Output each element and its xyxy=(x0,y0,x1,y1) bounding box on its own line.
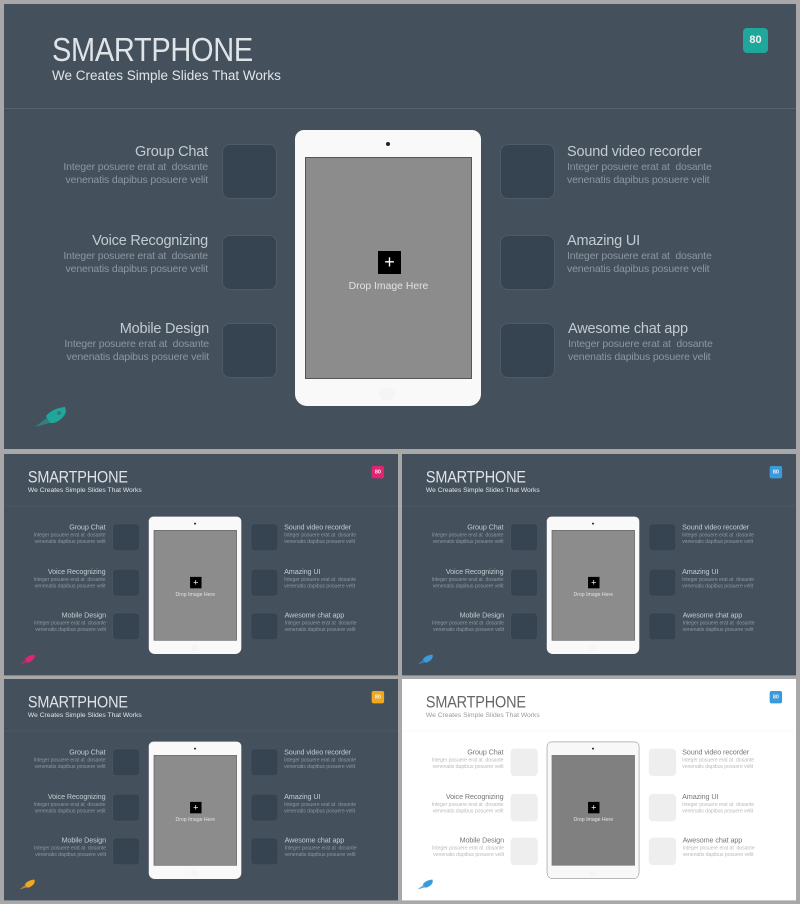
icon box: Voice Recognizing xyxy=(510,569,538,596)
page badge: 80 xyxy=(773,694,779,700)
small slide: blue xyxy=(402,454,796,675)
feature: Voice Recognizing: Integer posuere erat at dosante xyxy=(63,250,208,262)
icon box: Mobile Design xyxy=(222,323,277,378)
feature: Sound video recorder: venenatis dapibus posuere velit xyxy=(682,764,753,770)
icon box: Group Chat xyxy=(222,144,277,199)
feature: Amazing UI: venenatis dapibus posuere velit xyxy=(682,808,753,814)
tablet mockup: Drop Image Here xyxy=(349,281,428,292)
feature: Awesome chat app: venenatis dapibus posuere velit xyxy=(285,852,355,858)
feature: Amazing UI: Integer posuere erat at dosante xyxy=(567,250,712,262)
icon box: Sound video recorder xyxy=(500,144,555,199)
main slide: teal xyxy=(4,4,796,449)
feature: Awesome chat app: Integer posuere erat at dosante xyxy=(285,620,357,626)
icon box: Voice Recognizing xyxy=(222,235,277,290)
feature: Group Chat: venenatis dapibus posuere velit xyxy=(35,764,105,770)
feature: Group Chat xyxy=(432,524,504,545)
title: SMARTPHONE xyxy=(28,467,128,486)
feature: Group Chat: venenatis dapibus posuere velit xyxy=(66,174,208,186)
feature: Sound video recorder: Integer posuere erat at dosante xyxy=(567,161,712,173)
feature: Voice Recognizing: venenatis dapibus posuere velit xyxy=(433,808,503,814)
icon box: Amazing UI xyxy=(649,794,676,821)
feature: Sound video recorder xyxy=(567,144,712,186)
feature: Amazing UI xyxy=(682,568,754,589)
feature: Awesome chat app: venenatis dapibus posuere velit xyxy=(285,627,355,633)
page badge xyxy=(743,28,768,53)
icon box: Amazing UI xyxy=(649,569,676,596)
feature: Sound video recorder: Integer posuere erat at dosante xyxy=(284,532,356,538)
page badge: 80 xyxy=(773,469,779,475)
page badge: 80 xyxy=(749,34,762,46)
feature: Voice Recognizing: Voice Recognizing xyxy=(446,793,503,801)
feature: Voice Recognizing xyxy=(432,793,504,814)
tablet mockup: + xyxy=(591,577,596,587)
feature: Awesome chat app: Integer posuere erat at dosante xyxy=(683,845,755,851)
tablet mockup xyxy=(295,130,481,406)
feature: Sound video recorder xyxy=(682,749,754,770)
feature: Voice Recognizing: Voice Recognizing xyxy=(48,568,105,576)
feature: Voice Recognizing: Integer posuere erat at dosante xyxy=(432,801,503,807)
feature: Mobile Design: Integer posuere erat at dosante xyxy=(34,845,106,851)
feature: Group Chat xyxy=(63,144,208,186)
feature: Awesome chat app: Awesome chat app xyxy=(285,837,344,845)
feature: Amazing UI: Amazing UI xyxy=(284,793,320,801)
page badge xyxy=(770,691,782,703)
icon box: Mobile Design xyxy=(510,838,538,865)
icon box: Mobile Design xyxy=(510,613,538,640)
subtitle: We Creates Simple Slides That Works xyxy=(52,68,281,83)
feature: Mobile Design: Mobile Design xyxy=(460,837,504,845)
feature: Group Chat: Group Chat xyxy=(467,749,503,757)
feature: Group Chat xyxy=(34,524,106,545)
icon box: Group Chat xyxy=(510,524,538,551)
title: SMARTPHONE xyxy=(52,31,253,68)
feature: Amazing UI: venenatis dapibus posuere velit xyxy=(682,583,753,589)
feature: Sound video recorder: Sound video recorder xyxy=(284,524,351,532)
tablet mockup xyxy=(149,517,241,654)
feature: Group Chat: Group Chat xyxy=(69,524,105,532)
feature: Mobile Design xyxy=(432,612,504,633)
feature: Voice Recognizing: Integer posuere erat at dosante xyxy=(432,576,503,582)
feature: Group Chat: venenatis dapibus posuere velit xyxy=(35,539,105,545)
feature: Mobile Design: venenatis dapibus posuere velit xyxy=(67,351,209,363)
page badge: 80 xyxy=(375,469,381,475)
feature: Awesome chat app: Awesome chat app xyxy=(568,321,688,337)
feature: Awesome chat app xyxy=(682,837,755,858)
icon box: Voice Recognizing xyxy=(112,569,140,596)
feature: Voice Recognizing: venenatis dapibus posuere velit xyxy=(35,583,105,589)
subtitle: We Creates Simple Slides That Works xyxy=(28,486,142,493)
icon box: Sound video recorder xyxy=(649,524,676,551)
feature: Group Chat: venenatis dapibus posuere velit xyxy=(433,764,503,770)
title: SMARTPHONE xyxy=(426,467,526,486)
feature: Awesome chat app: venenatis dapibus posuere velit xyxy=(568,351,710,363)
feature: Voice Recognizing: Voice Recognizing xyxy=(446,568,503,576)
feature: Voice Recognizing xyxy=(34,793,106,814)
tablet mockup xyxy=(547,517,639,654)
subtitle: We Creates Simple Slides That Works xyxy=(28,711,142,718)
feature: Mobile Design xyxy=(34,837,106,858)
tablet mockup: Drop Image Here xyxy=(573,817,613,822)
feature: Group Chat: Integer posuere erat at dosante xyxy=(34,757,105,763)
feature: Sound video recorder xyxy=(284,749,356,770)
icon: rocket xyxy=(20,880,35,890)
feature: Sound video recorder: venenatis dapibus posuere velit xyxy=(284,764,355,770)
icon box: Mobile Design xyxy=(112,613,140,640)
page badge xyxy=(372,466,384,478)
small slide: amber xyxy=(4,679,398,900)
feature: Awesome chat app: Awesome chat app xyxy=(683,837,742,845)
feature: Sound video recorder: Sound video recorder xyxy=(682,749,749,757)
icon box: Voice Recognizing xyxy=(510,794,538,821)
feature: Awesome chat app: Integer posuere erat at dosante xyxy=(683,620,755,626)
feature: Amazing UI: Amazing UI xyxy=(567,233,640,249)
tablet mockup: Drop Image Here xyxy=(175,817,215,822)
tablet mockup: Drop Image Here xyxy=(573,592,613,597)
feature: Sound video recorder: venenatis dapibus posuere velit xyxy=(284,539,355,545)
page badge xyxy=(770,466,782,478)
tablet mockup: + xyxy=(384,252,395,272)
subtitle: We Creates Simple Slides That Works xyxy=(426,486,540,493)
title: SMARTPHONE xyxy=(28,692,128,711)
icon box: Amazing UI xyxy=(251,794,278,821)
icon box: Group Chat xyxy=(112,749,140,776)
icon box: Sound video recorder xyxy=(251,749,278,776)
feature: Mobile Design xyxy=(34,612,106,633)
feature: Voice Recognizing: venenatis dapibus posuere velit xyxy=(35,808,105,814)
icon box: Group Chat xyxy=(510,749,538,776)
feature: Awesome chat app xyxy=(284,612,357,633)
feature: Mobile Design: venenatis dapibus posuere velit xyxy=(35,627,106,633)
tablet mockup: + xyxy=(193,802,198,812)
feature: Mobile Design: venenatis dapibus posuere velit xyxy=(433,852,504,858)
feature: Group Chat: Integer posuere erat at dosante xyxy=(432,757,503,763)
feature: Sound video recorder: Integer posuere erat at dosante xyxy=(682,757,754,763)
feature: Mobile Design: Mobile Design xyxy=(460,612,504,620)
feature: Mobile Design: venenatis dapibus posuere velit xyxy=(35,852,106,858)
subtitle: We Creates Simple Slides That Works xyxy=(426,711,540,718)
feature: Group Chat: Integer posuere erat at dosante xyxy=(63,161,208,173)
icon box: Mobile Design xyxy=(112,838,140,865)
feature: Voice Recognizing: Integer posuere erat at dosante xyxy=(34,576,105,582)
feature: Group Chat xyxy=(34,749,106,770)
feature: Mobile Design: Mobile Design xyxy=(62,612,106,620)
icon box: Group Chat xyxy=(112,524,140,551)
feature: Group Chat: Group Chat xyxy=(69,749,105,757)
feature: Group Chat xyxy=(432,749,504,770)
feature: Voice Recognizing: venenatis dapibus posuere velit xyxy=(433,583,503,589)
feature: Sound video recorder xyxy=(682,524,754,545)
feature: Amazing UI: venenatis dapibus posuere velit xyxy=(284,808,355,814)
feature: Group Chat: Group Chat xyxy=(467,524,503,532)
feature: Sound video recorder: Sound video recorder xyxy=(682,524,749,532)
feature: Group Chat: Integer posuere erat at dosante xyxy=(34,532,105,538)
icon: rocket xyxy=(418,654,433,664)
page badge: 80 xyxy=(375,694,381,700)
feature: Voice Recognizing xyxy=(63,233,208,275)
feature: Amazing UI: venenatis dapibus posuere velit xyxy=(284,583,355,589)
feature: Group Chat: Group Chat xyxy=(135,144,208,160)
feature: Mobile Design: Mobile Design xyxy=(120,321,209,337)
icon box: Amazing UI xyxy=(251,569,278,596)
title: SMARTPHONE xyxy=(426,692,526,711)
feature: Awesome chat app: venenatis dapibus posuere velit xyxy=(683,852,753,858)
feature: Sound video recorder xyxy=(284,524,356,545)
feature: Voice Recognizing xyxy=(432,568,504,589)
feature: Mobile Design xyxy=(64,321,210,363)
tablet mockup: + xyxy=(193,577,198,587)
feature: Amazing UI xyxy=(284,793,356,814)
feature: Awesome chat app: Awesome chat app xyxy=(285,612,344,620)
feature: Mobile Design: Integer posuere erat at dosante xyxy=(432,620,504,626)
icon box: Sound video recorder xyxy=(649,749,676,776)
feature: Group Chat: venenatis dapibus posuere velit xyxy=(433,539,503,545)
icon box: Voice Recognizing xyxy=(112,794,140,821)
feature: Sound video recorder: Sound video recorder xyxy=(284,749,351,757)
feature: Amazing UI: Integer posuere erat at dosante xyxy=(682,576,754,582)
feature: Awesome chat app xyxy=(568,321,713,363)
feature: Amazing UI xyxy=(682,793,754,814)
feature: Awesome chat app: venenatis dapibus posuere velit xyxy=(683,627,753,633)
feature: Awesome chat app xyxy=(284,837,357,858)
icon: rocket xyxy=(35,407,66,427)
feature: Mobile Design: Mobile Design xyxy=(62,837,106,845)
feature: Amazing UI: Integer posuere erat at dosante xyxy=(284,801,356,807)
feature: Sound video recorder: Sound video recorder xyxy=(567,144,702,160)
feature: Amazing UI: Integer posuere erat at dosante xyxy=(284,576,356,582)
feature: Awesome chat app: Integer posuere erat at dosante xyxy=(285,845,357,851)
tablet mockup xyxy=(547,742,639,879)
feature: Voice Recognizing: Integer posuere erat at dosante xyxy=(34,801,105,807)
feature: Awesome chat app: Integer posuere erat at dosante xyxy=(568,338,713,350)
icon box: Awesome chat app xyxy=(500,323,555,378)
feature: Awesome chat app: Awesome chat app xyxy=(683,612,742,620)
feature: Amazing UI xyxy=(567,233,712,275)
feature: Amazing UI: venenatis dapibus posuere velit xyxy=(567,263,709,275)
icon box: Sound video recorder xyxy=(251,524,278,551)
feature: Sound video recorder: Integer posuere erat at dosante xyxy=(682,532,754,538)
feature: Sound video recorder: venenatis dapibus posuere velit xyxy=(567,174,709,186)
icon: rocket xyxy=(20,654,35,664)
icon: rocket xyxy=(418,880,433,890)
feature: Amazing UI: Amazing UI xyxy=(682,568,718,576)
icon box: Awesome chat app xyxy=(251,613,278,640)
feature: Group Chat: Integer posuere erat at dosante xyxy=(432,532,503,538)
feature: Voice Recognizing xyxy=(34,568,106,589)
icon box: Awesome chat app xyxy=(251,838,278,865)
tablet mockup xyxy=(149,742,241,879)
feature: Sound video recorder: venenatis dapibus posuere velit xyxy=(682,539,753,545)
feature: Voice Recognizing: Voice Recognizing xyxy=(48,793,105,801)
feature: Sound video recorder: Integer posuere erat at dosante xyxy=(284,757,356,763)
tablet mockup: + xyxy=(591,802,596,812)
icon box: Awesome chat app xyxy=(649,613,676,640)
feature: Mobile Design: venenatis dapibus posuere velit xyxy=(433,627,504,633)
feature: Mobile Design: Integer posuere erat at dosante xyxy=(64,338,209,350)
feature: Amazing UI xyxy=(284,568,356,589)
small slide: pink xyxy=(4,454,398,675)
feature: Awesome chat app xyxy=(682,612,755,633)
feature: Amazing UI: Amazing UI xyxy=(284,568,320,576)
icon box: Amazing UI xyxy=(500,235,555,290)
feature: Voice Recognizing: venenatis dapibus posuere velit xyxy=(66,263,208,275)
feature: Amazing UI: Integer posuere erat at dosante xyxy=(682,801,754,807)
feature: Mobile Design: Integer posuere erat at dosante xyxy=(34,620,106,626)
icon box: Awesome chat app xyxy=(649,838,676,865)
feature: Voice Recognizing: Voice Recognizing xyxy=(92,233,208,249)
feature: Mobile Design: Integer posuere erat at dosante xyxy=(432,845,504,851)
feature: Mobile Design xyxy=(432,837,504,858)
page badge xyxy=(372,691,384,703)
feature: Amazing UI: Amazing UI xyxy=(682,793,718,801)
small slide: light theme xyxy=(402,679,796,900)
tablet mockup: Drop Image Here xyxy=(175,592,215,597)
